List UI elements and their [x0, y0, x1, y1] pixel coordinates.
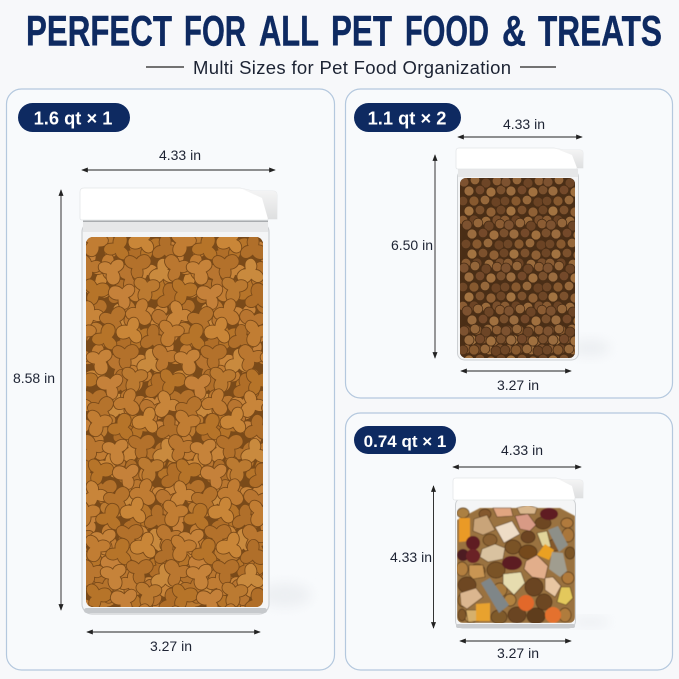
badge: 1.1 qt × 2: 1.1 qt × 2 [368, 108, 446, 128]
height dimension: 6.50 in [391, 237, 433, 253]
width dimension: bottom: 3.27 in [150, 638, 192, 654]
width dimension: bottom: 3.27 in [497, 645, 539, 661]
jar shadow [570, 618, 610, 626]
container with mixed treats [453, 478, 583, 628]
width dimension: top [453, 442, 581, 467]
container with round kibble [456, 148, 584, 360]
treats: sardines [481, 526, 568, 613]
treats: red berries [457, 508, 558, 570]
title: ALL [259, 8, 319, 56]
badge: 0.74 qt × 1 [354, 426, 456, 454]
title: FOR [184, 8, 246, 56]
lid [453, 478, 583, 500]
title: PET [331, 8, 392, 56]
lid [80, 188, 277, 220]
title [26, 8, 662, 56]
width dimension: top: 4.33 in [501, 442, 543, 458]
lid [456, 148, 583, 169]
panel: 0.74 qt container [346, 413, 672, 670]
title: PERFECT [26, 8, 172, 56]
badge: 1.6 qt × 1 [18, 103, 130, 132]
badge: 0.74 qt × 1: 0.74 qt × 1 [364, 432, 446, 451]
height dimension: 4.33 in [390, 549, 432, 565]
jar shadow [259, 583, 311, 607]
panel: 1.6 qt container [6, 89, 351, 670]
panel: 1.1 qt container [346, 89, 672, 398]
height dimension: 8.58 in [13, 370, 55, 386]
brown kibble [456, 508, 575, 624]
width dimension: top: 4.33 in [503, 116, 545, 132]
width dimension: bottom [460, 641, 571, 661]
treats: cookies and freeze-dried cubes [460, 505, 573, 622]
badge: 1.6 qt × 1: 1.6 qt × 1 [34, 108, 112, 128]
badge: 1.1 qt × 2 [354, 103, 461, 132]
width dimension: bottom [461, 371, 571, 393]
subtitle: Multi Sizes for Pet Food Organization [193, 57, 511, 78]
treats: orange pieces [459, 518, 561, 623]
width dimension: top: 4.33 in [159, 147, 201, 163]
width dimension: bottom: 3.27 in [497, 377, 539, 393]
container with dog biscuits [80, 188, 278, 615]
title: FOOD [405, 8, 489, 56]
title: & [502, 8, 526, 56]
width dimension: top [458, 116, 582, 137]
jar shadow [570, 340, 610, 356]
